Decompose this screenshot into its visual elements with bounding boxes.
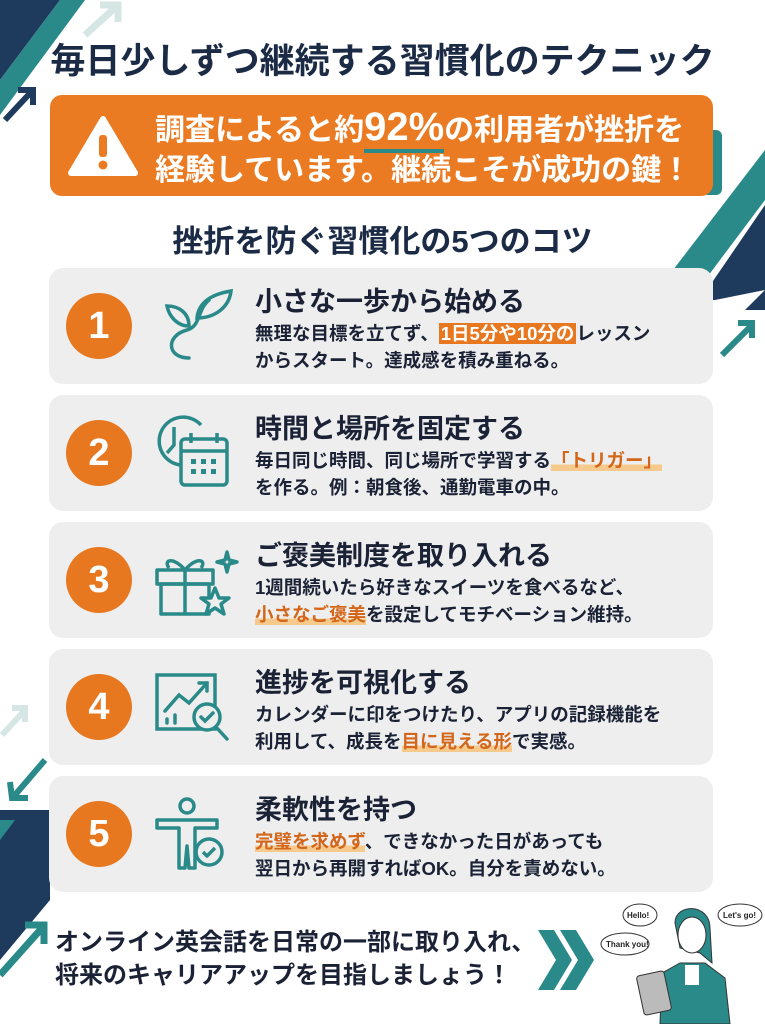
card 3: 1週間続いたら好きなスイーツを食べるなど、	[255, 577, 634, 598]
card 3: 3	[88, 559, 110, 601]
card 5: 柔軟性を持つ	[255, 795, 417, 825]
icon: flexible person	[155, 797, 224, 870]
card 1	[49, 268, 713, 384]
illustration: woman with tablet: Thank you!	[606, 940, 649, 949]
card 3	[49, 522, 713, 638]
card 2: 2	[88, 432, 110, 474]
card 3: 小さなご褒美を設定してモチベーション維持。	[255, 604, 643, 625]
illustration: woman with tablet: Hello!	[627, 911, 649, 920]
banner text: 調査によると約92%の利用者が挫折を	[155, 105, 684, 149]
card 4: 4	[88, 686, 110, 728]
card 5: 完璧を求めず、できなかった日があっても	[255, 831, 603, 852]
footer message: オンライン英会話を日常の一部に取り入れ、	[55, 929, 535, 956]
card 5: 5	[88, 813, 110, 855]
banner text	[155, 105, 691, 187]
arrow: chevrons	[538, 930, 594, 990]
icon: warning	[68, 116, 138, 176]
alert banner	[50, 95, 722, 196]
card 3: ご褒美制度を取り入れる	[255, 541, 552, 571]
illustration: woman with tablet: Let's go!	[723, 911, 756, 920]
icon: gift	[155, 550, 239, 616]
card 5	[49, 776, 713, 892]
footer message: 将来のキャリアアップを目指しましょう！	[55, 962, 511, 989]
card 4: カレンダーに印をつけたり、アプリの記録機能を	[255, 704, 661, 725]
card 2	[49, 395, 713, 511]
icon: clock calendar	[157, 415, 229, 487]
card 5: 翌日から再開すればOK。自分を責めない。	[255, 858, 616, 879]
footer message	[55, 929, 535, 989]
icon: sprout	[164, 288, 233, 360]
subtitle: 挫折を防ぐ習慣化の5つのコツ	[172, 224, 593, 259]
card 1: 無理な目標を立てず、1日5分や10分のレッスン	[255, 323, 650, 344]
card 4: 進捗を可視化する	[255, 668, 471, 698]
card 4: 利用して、成長を目に見える形で実感。	[255, 731, 586, 752]
illustration: woman with tablet	[600, 904, 762, 1024]
icon: chart magnifier	[155, 673, 229, 741]
card 2: 時間と場所を固定する	[255, 414, 525, 444]
banner text: 経験しています。継続こそが成功の鍵！	[155, 154, 691, 187]
card 1: 1	[88, 305, 110, 347]
title: 毎日少しずつ継続する習慣化のテクニック	[50, 42, 715, 81]
card 1: 小さな一歩から始める	[255, 287, 525, 317]
card 2: を作る。例：朝食後、通勤電車の中。	[255, 477, 570, 498]
card 2: 毎日同じ時間、同じ場所で学習する「トリガー」	[255, 450, 662, 471]
card 4	[49, 649, 713, 765]
card 1: からスタート。達成感を積み重ねる。	[255, 350, 569, 371]
